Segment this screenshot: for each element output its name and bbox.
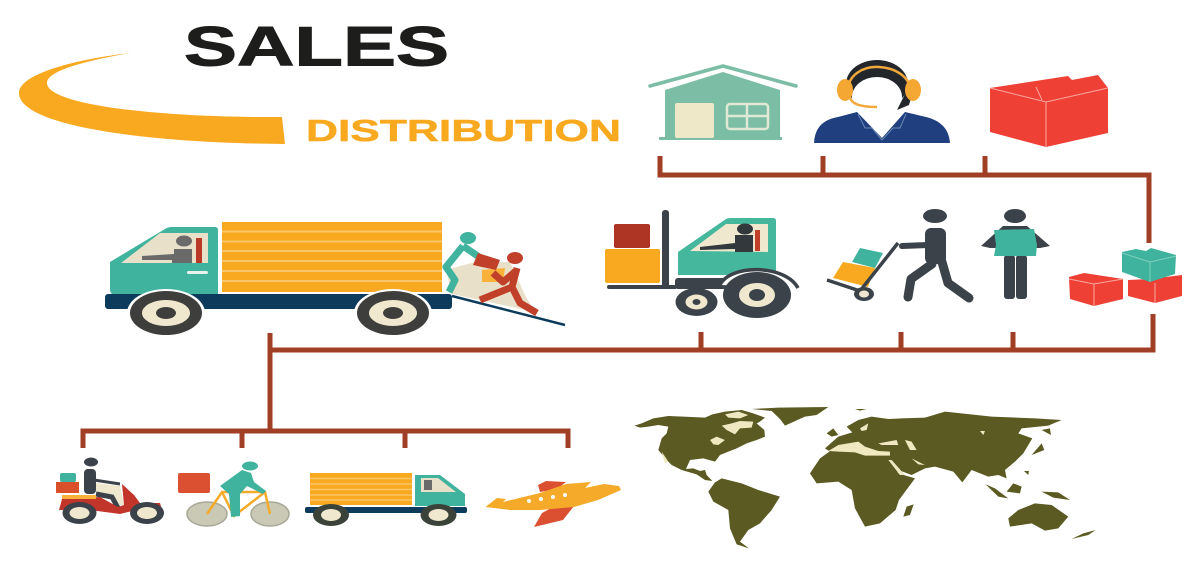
truck cargo	[222, 222, 442, 292]
connector: bottom bracket	[83, 431, 568, 448]
icon: worker carrying box	[981, 209, 1050, 299]
icon: warehouse	[650, 66, 796, 140]
connector: top bracket	[660, 156, 1149, 243]
loading ramp	[452, 296, 565, 325]
world map	[634, 407, 1096, 548]
icon: stacked parcels	[1069, 248, 1182, 306]
truck chassis	[105, 294, 452, 309]
australia	[1008, 503, 1068, 531]
icon: orange swoosh	[19, 53, 285, 144]
islands	[827, 409, 1096, 539]
icon: large delivery truck	[105, 222, 565, 337]
truck wheels	[127, 289, 432, 337]
icon: delivery bicycle	[178, 462, 289, 526]
icon: forklift	[605, 210, 798, 318]
greenland	[752, 407, 828, 426]
icon: worker with hand cart	[827, 209, 969, 301]
subtitle: distribution: DISTRIBUTION	[306, 113, 621, 148]
icon: call centre agent	[814, 60, 950, 143]
connector: middle bracket	[270, 314, 1153, 431]
north america	[634, 410, 765, 481]
workers loading boxes	[446, 232, 537, 313]
icon: small delivery truck	[305, 473, 467, 526]
eurasia	[825, 412, 1062, 482]
lakes and inland seas	[662, 412, 985, 475]
africa	[810, 450, 915, 527]
title: sales: SALES	[184, 14, 449, 78]
icon: delivery scooter	[56, 458, 164, 524]
truck cab	[110, 227, 218, 295]
south america	[708, 478, 780, 548]
icon: airplane	[486, 481, 621, 527]
icon: red parcel box	[990, 75, 1108, 147]
